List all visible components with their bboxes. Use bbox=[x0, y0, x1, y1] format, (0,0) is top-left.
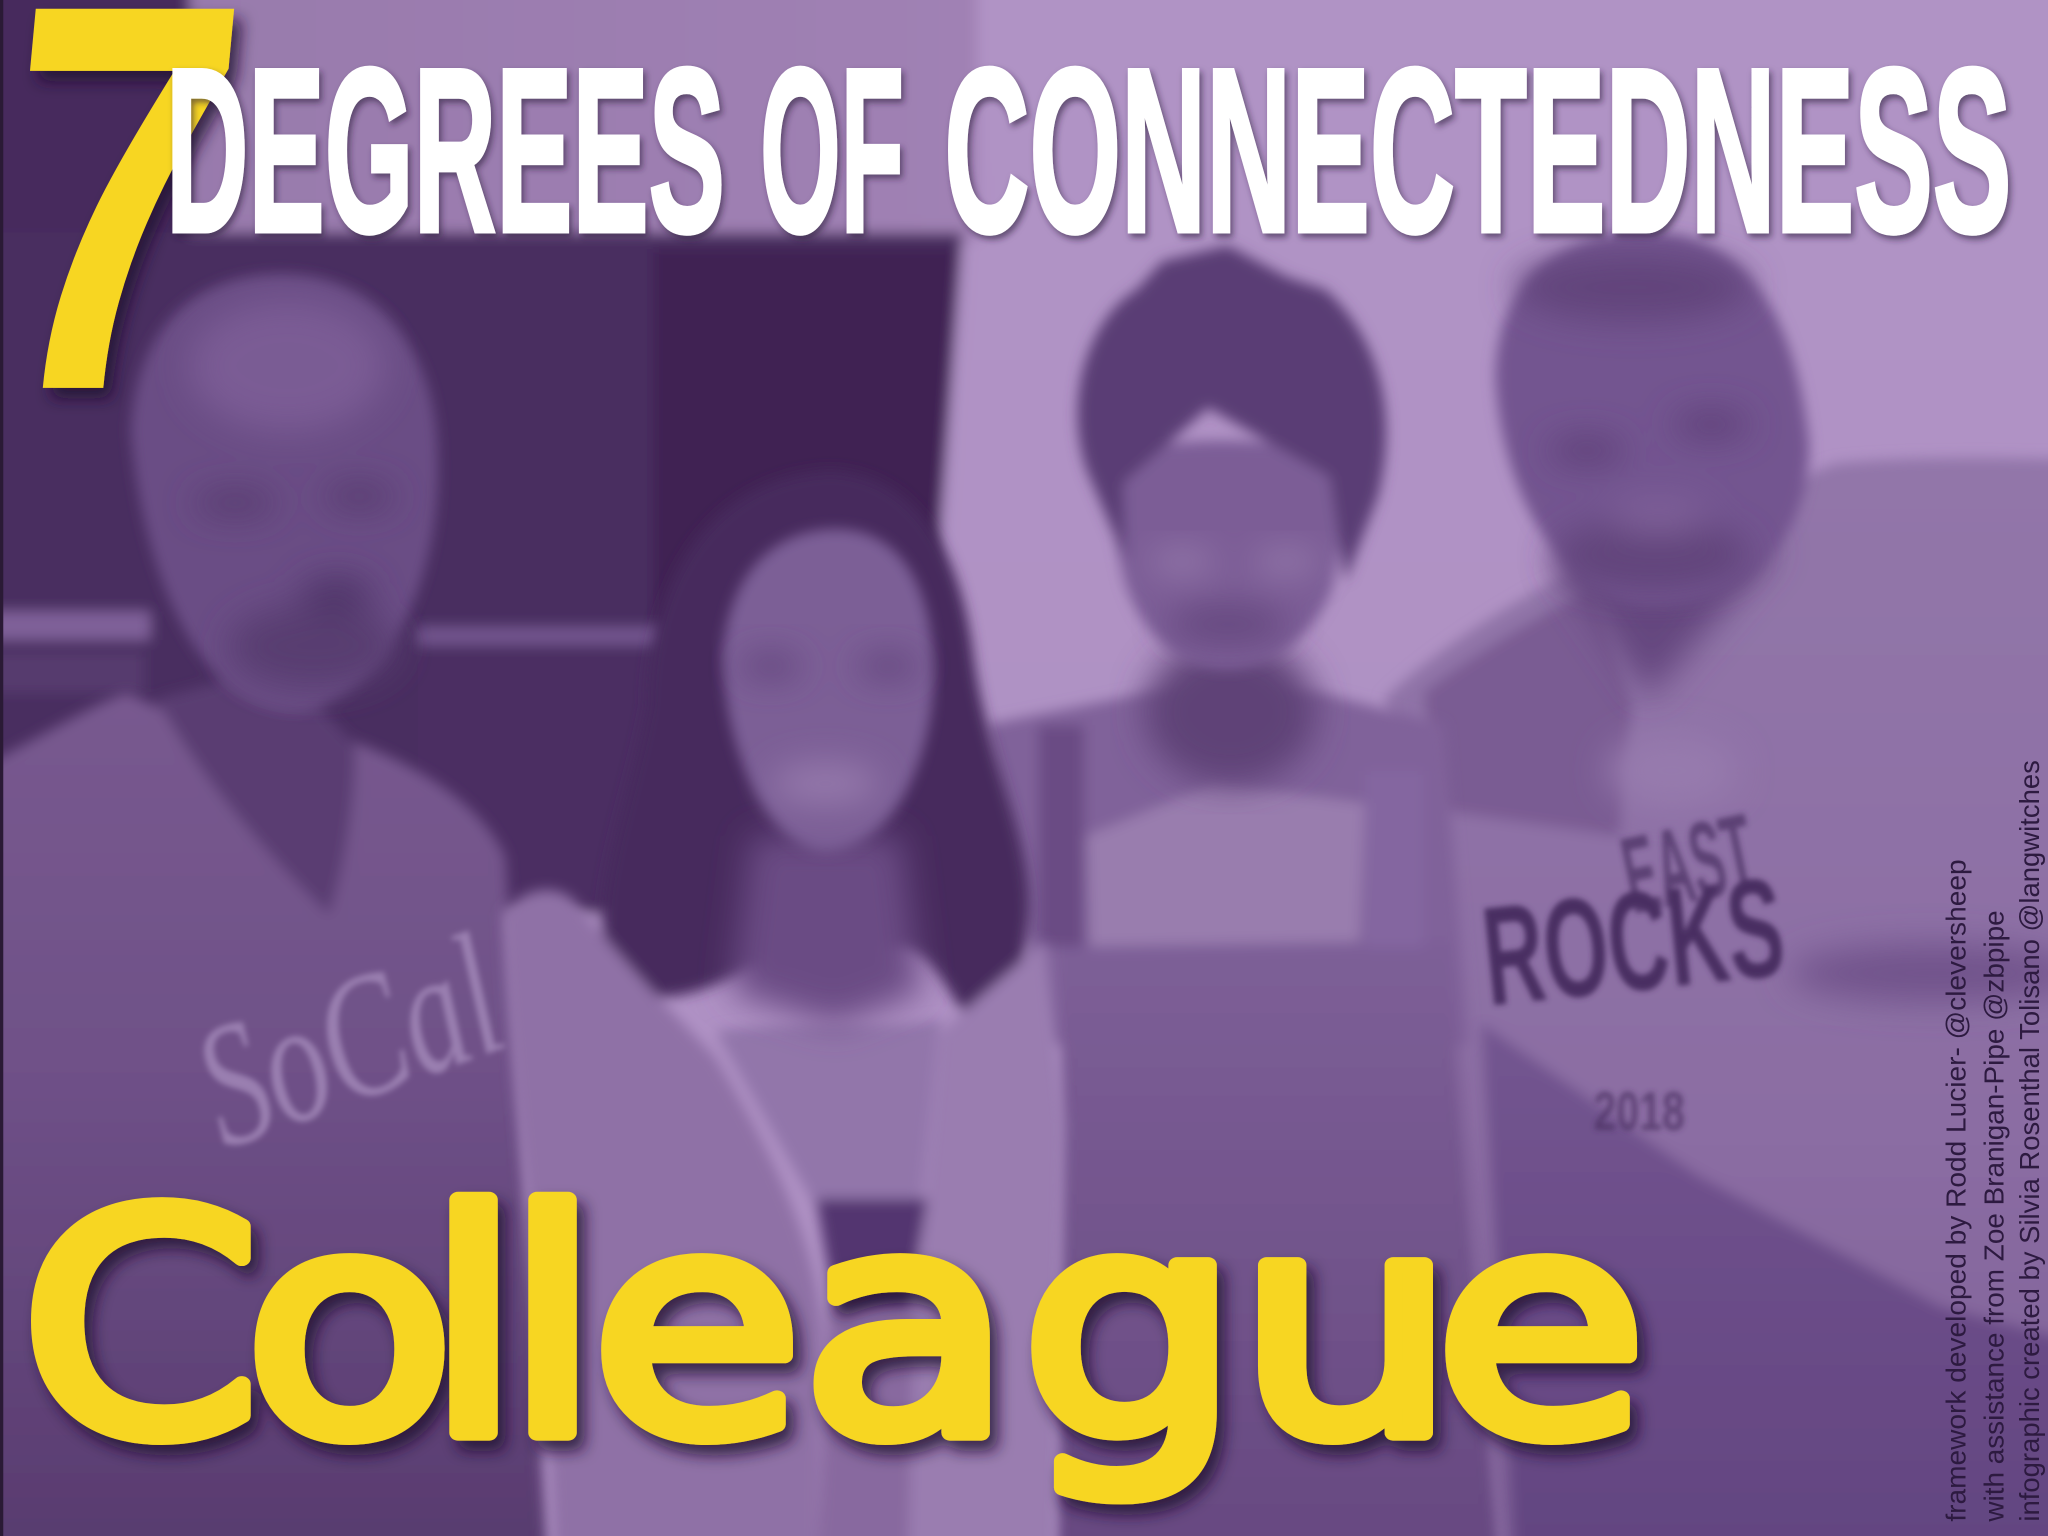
person 2: woman with long hair and light cardigan bbox=[503, 470, 1064, 1536]
credit line 3: infographic created by Silvia Rosenthal Tolisano @langwitches bbox=[2014, 760, 2045, 1522]
person 4: man at right with East Rocks shirt bbox=[1384, 232, 2048, 1536]
title: degrees of connectedness: DEGREES bbox=[166, 19, 725, 281]
head of person 4 bbox=[1496, 232, 1809, 605]
neck and chest of person 2 bbox=[731, 836, 921, 1025]
credit line 1: framework developed by Rodd Lucier- @cleversheep bbox=[1941, 859, 1972, 1522]
person 1: man at left with SoCal shirt bbox=[0, 274, 549, 1536]
title: degrees of connectedness bbox=[166, 19, 2011, 281]
left edge line bbox=[0, 0, 3, 1536]
heading: Colleague: Colleague bbox=[20, 1148, 1647, 1505]
face shading on person 3 bbox=[1148, 550, 1320, 645]
title: degrees of connectedness: OF bbox=[760, 19, 904, 281]
face and shirt shading on person 4 bbox=[1515, 253, 2048, 1002]
shirt lettering on person 4: 2018 bbox=[1593, 1080, 1685, 1142]
face of person 2 bbox=[722, 529, 934, 852]
face shading on person 1 bbox=[189, 300, 398, 688]
shirt lettering on person 4: ROCKS bbox=[1476, 847, 1791, 1036]
credit line 2: with assistance from Zoe Branigan-Pipe @zbpipe bbox=[1979, 910, 2010, 1523]
person 3: woman with spiky hair and overalls bbox=[986, 246, 1502, 1536]
shirt lettering on person 4: EAST bbox=[1612, 791, 1765, 938]
neck shadow on person 4 bbox=[1554, 496, 1776, 699]
credits: rotated attribution text bbox=[1941, 760, 2045, 1523]
neck of person 3 bbox=[1144, 639, 1317, 785]
shirt lettering on person 1: SoCal bbox=[171, 898, 526, 1186]
face shading on person 2 bbox=[739, 654, 920, 805]
shirt lettering on person 4 bbox=[1476, 791, 1791, 1142]
